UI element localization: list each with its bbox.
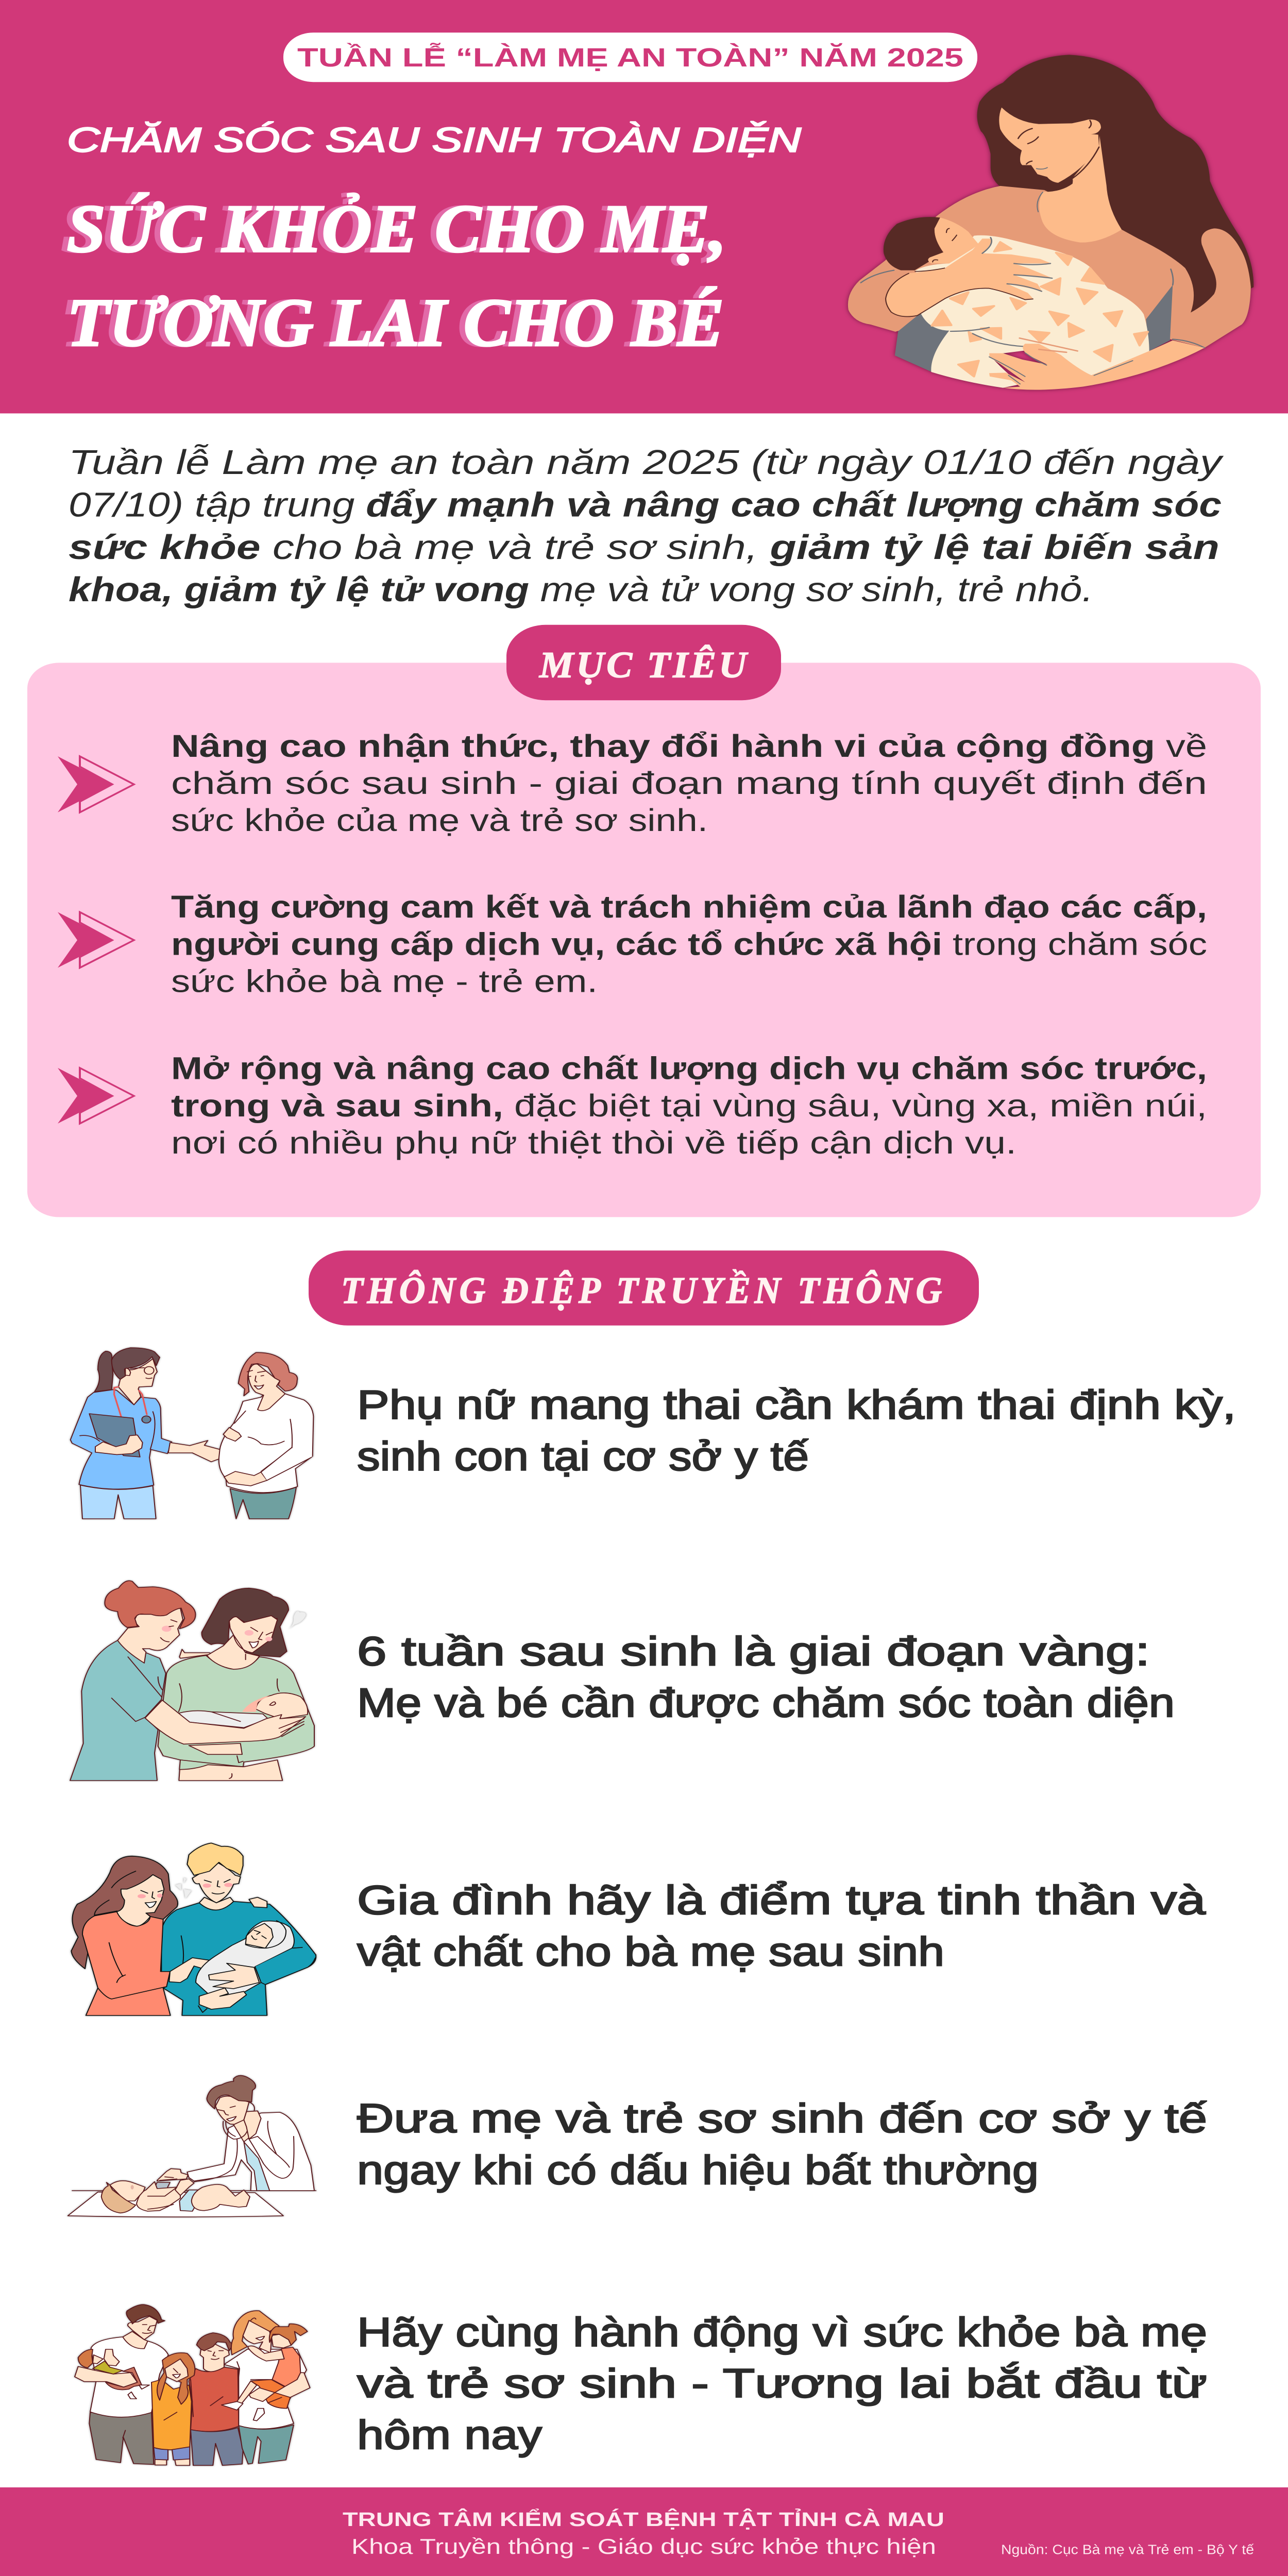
goal 3 text: trong và sau sinh, đặc biệt tại vùng sâu, vùng xa, miền núi, [171, 1088, 1207, 1123]
illustration: doctor and pregnant woman [69, 1346, 315, 1520]
message 4 [68, 2076, 1207, 2217]
message 3 text [357, 1877, 1206, 1974]
heading: communication messages: THÔNG ĐIỆP TRUYỀN THÔNG [341, 1269, 946, 1312]
intro paragraph: 07/10) tập trung đẩy mạnh và nâng cao chất lượng chăm sóc [69, 485, 1222, 524]
message 2 [70, 1581, 1175, 1781]
message 1 text: Phụ nữ mang thai cần khám thai định kỳ, [357, 1382, 1236, 1427]
goal 1 [58, 728, 1207, 838]
message 5 text: Hãy cùng hành động vì sức khỏe bà mẹ [357, 2309, 1207, 2354]
goal 1 text: chăm sóc sau sinh - giai đoạn mang tính quyết định đến [171, 766, 1207, 801]
message 2 text: Mẹ và bé cần được chăm sóc toàn diện [357, 1680, 1175, 1725]
heading: goals: MỤC TIÊU [538, 644, 749, 685]
icon: double chevron [58, 912, 134, 968]
message 1 text: sinh con tại cơ sở y tế [357, 1433, 809, 1479]
message 3 text: vật chất cho bà mẹ sau sinh [357, 1929, 944, 1974]
illustration: mother nursing baby [845, 53, 1257, 393]
icon: double chevron [58, 756, 134, 812]
intro paragraph [69, 443, 1224, 609]
subtitle: CHĂM SÓC SAU SINH TOÀN DIỆN [67, 121, 801, 159]
goal 3 text: Mở rộng và nâng cao chất lượng dịch vụ chăm sóc trước, [171, 1051, 1207, 1086]
goal 1 text: Nâng cao nhận thức, thay đổi hành vi của cộng đồng về [171, 728, 1207, 764]
illustration: doctor examining baby [66, 2074, 317, 2218]
illustration: family of five [73, 2303, 312, 2467]
intro paragraph: Tuần lễ Làm mẹ an toàn năm 2025 (từ ngày 01/10 đến ngày [69, 443, 1224, 482]
message 1 [71, 1348, 1236, 1519]
icon: double chevron [58, 1068, 134, 1124]
heading: communication messages [309, 1250, 979, 1326]
message 4 text: ngay khi có dấu hiệu bất thường [357, 2147, 1039, 2193]
message 2 text [357, 1628, 1175, 1725]
message 2 text: 6 tuần sau sinh là giai đoạn vàng: [357, 1628, 1150, 1674]
footer [0, 2487, 1288, 2576]
message 5 text [357, 2309, 1207, 2458]
panel: goals [27, 625, 1261, 1217]
goal 3 [58, 1051, 1207, 1160]
goal 1 text: sức khỏe của mẹ và trẻ sơ sinh. [171, 803, 708, 838]
message 4 text [357, 2095, 1207, 2193]
goal 2 text: người cung cấp dịch vụ, các tổ chức xã hội trong chăm sóc [171, 927, 1207, 962]
message 5 text: hôm nay [357, 2412, 542, 2458]
message 5 text: và trẻ sơ sinh - Tương lai bắt đầu từ [357, 2360, 1207, 2406]
header banner [0, 0, 1288, 413]
goal 3 text [171, 1051, 1207, 1160]
footer department: Khoa Truyền thông - Giáo dục sức khỏe thực hiện [351, 2534, 936, 2558]
goal 3 text: nơi có nhiều phụ nữ thiệt thòi về tiếp cận dịch vụ. [171, 1125, 1016, 1160]
intro paragraph: sức khỏe cho bà mẹ và trẻ sơ sinh, giảm tỷ lệ tai biến sản [69, 528, 1219, 567]
goal 1 text [171, 728, 1207, 838]
message 3 [71, 1843, 1206, 2015]
message 5 [75, 2304, 1207, 2465]
goal 2 [58, 889, 1207, 999]
intro paragraph: khoa, giảm tỷ lệ tử vong mẹ và tử vong sơ sinh, trẻ nhỏ. [69, 570, 1093, 609]
goal 2 text: sức khỏe bà mẹ - trẻ em. [171, 964, 598, 999]
goal 2 text: Tăng cường cam kết và trách nhiệm của lãnh đạo các cấp, [171, 889, 1207, 924]
goal 2 text [171, 889, 1207, 999]
heading: goals [506, 625, 781, 700]
footer source: Nguồn: Cục Bà mẹ và Trẻ em - Bộ Y tế [1001, 2543, 1254, 2557]
footer organisation: TRUNG TÂM KIỂM SOÁT BỆNH TẬT TỈNH CÀ MAU [343, 2509, 944, 2531]
main title: TƯƠNG LAI CHO BÉ [67, 285, 724, 361]
message 1 text [357, 1382, 1236, 1479]
message 3 text: Gia đình hãy là điểm tựa tinh thần và [357, 1877, 1206, 1923]
main title: SỨC KHỎE CHO MẸ, [67, 191, 726, 266]
pill: campaign week title: TUẦN LỄ “LÀM MẸ AN TOÀN” NĂM 2025 [297, 43, 963, 72]
illustration: nurse helping new mother [68, 1580, 316, 1782]
message 4 text: Đưa mẹ và trẻ sơ sinh đến cơ sở y tế [357, 2095, 1207, 2141]
pill: campaign week title [283, 32, 977, 82]
illustration: family supporting mother and newborn [69, 1842, 318, 2017]
main title [67, 191, 726, 361]
